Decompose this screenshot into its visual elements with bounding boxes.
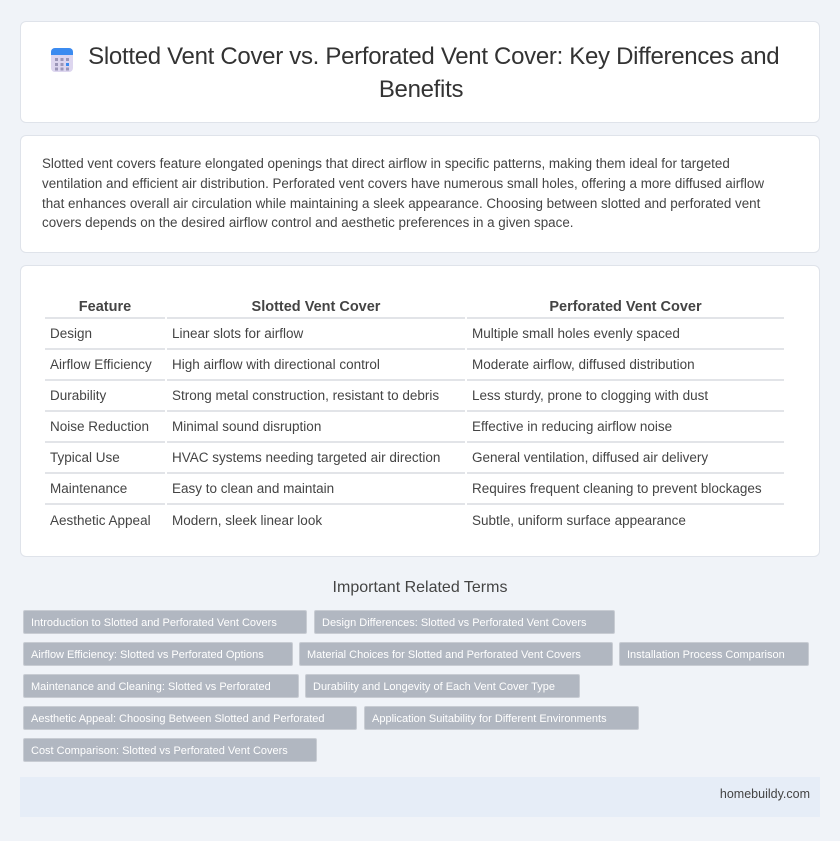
comparison table: Maintenance xyxy=(50,481,127,496)
icon: calendar xyxy=(51,48,73,72)
comparison table: Airflow Efficiency xyxy=(50,357,152,372)
footer: homebuildy.com xyxy=(720,787,810,801)
comparison table: Multiple small holes evenly spaced xyxy=(472,326,680,341)
related terms tags: Durability and Longevity of Each Vent Cover Type xyxy=(313,681,555,693)
title: Slotted Vent Cover vs. Perforated Vent Cover: Key Differences and Benefits xyxy=(88,43,779,103)
comparison table: Slotted Vent Cover xyxy=(252,299,380,315)
comparison table: Perforated Vent Cover xyxy=(549,299,702,315)
comparison table: Typical Use xyxy=(50,450,120,465)
comparison table: Aesthetic Appeal xyxy=(50,513,151,528)
related terms heading: Important Related Terms xyxy=(333,579,507,596)
description card xyxy=(20,135,820,253)
related terms tags: Cost Comparison: Slotted vs Perforated Vent Covers xyxy=(31,745,288,757)
comparison table: Modern, sleek linear look xyxy=(172,513,322,528)
comparison table: High airflow with directional control xyxy=(172,357,380,372)
related terms tags xyxy=(23,610,809,762)
comparison table: Requires frequent cleaning to prevent blockages xyxy=(472,481,762,496)
comparison table: Linear slots for airflow xyxy=(172,326,303,341)
footer xyxy=(20,777,820,817)
comparison table: General ventilation, diffused air delivery xyxy=(472,450,708,465)
description text: Slotted vent covers feature elongated openings that direct airflow in specific patterns, making them ideal for targeted ventilation and efficient air distribution. Perforated vent covers have numerous small holes, offering a more diffused airflow that enhances overall air circulation while maintaining a sleek appearance. Choosing between slotted and perforated vent covers depends on the desired airflow control and aesthetic preferences in a given space. xyxy=(42,156,764,230)
related terms tags: Maintenance and Cleaning: Slotted vs Perforated xyxy=(31,681,271,693)
title card xyxy=(20,21,820,123)
related terms tags: Aesthetic Appeal: Choosing Between Slotted and Perforated xyxy=(31,713,325,725)
comparison table: Noise Reduction xyxy=(50,419,149,434)
related terms tags: Installation Process Comparison xyxy=(627,649,785,661)
related terms tags: Design Differences: Slotted vs Perforated Vent Covers xyxy=(322,617,587,629)
comparison table card xyxy=(20,265,820,557)
related terms tags: Airflow Efficiency: Slotted vs Perforated Options xyxy=(31,649,264,661)
comparison table: Durability xyxy=(50,388,106,403)
comparison table: Less sturdy, prone to clogging with dust xyxy=(472,388,708,403)
related terms tags: Application Suitability for Different Environments xyxy=(372,713,607,725)
comparison table: Subtle, uniform surface appearance xyxy=(472,513,686,528)
comparison table: HVAC systems needing targeted air direction xyxy=(172,450,440,465)
comparison table xyxy=(45,299,784,528)
comparison table: Moderate airflow, diffused distribution xyxy=(472,357,695,372)
comparison table: Design xyxy=(50,326,92,341)
comparison table: Strong metal construction, resistant to debris xyxy=(172,388,439,403)
comparison table: Feature xyxy=(79,299,131,315)
related terms tags: Material Choices for Slotted and Perforated Vent Covers xyxy=(307,649,581,661)
comparison table: Minimal sound disruption xyxy=(172,419,321,434)
comparison table: Effective in reducing airflow noise xyxy=(472,419,672,434)
comparison table: Easy to clean and maintain xyxy=(172,481,334,496)
related terms tags: Introduction to Slotted and Perforated Vent Covers xyxy=(31,617,277,629)
